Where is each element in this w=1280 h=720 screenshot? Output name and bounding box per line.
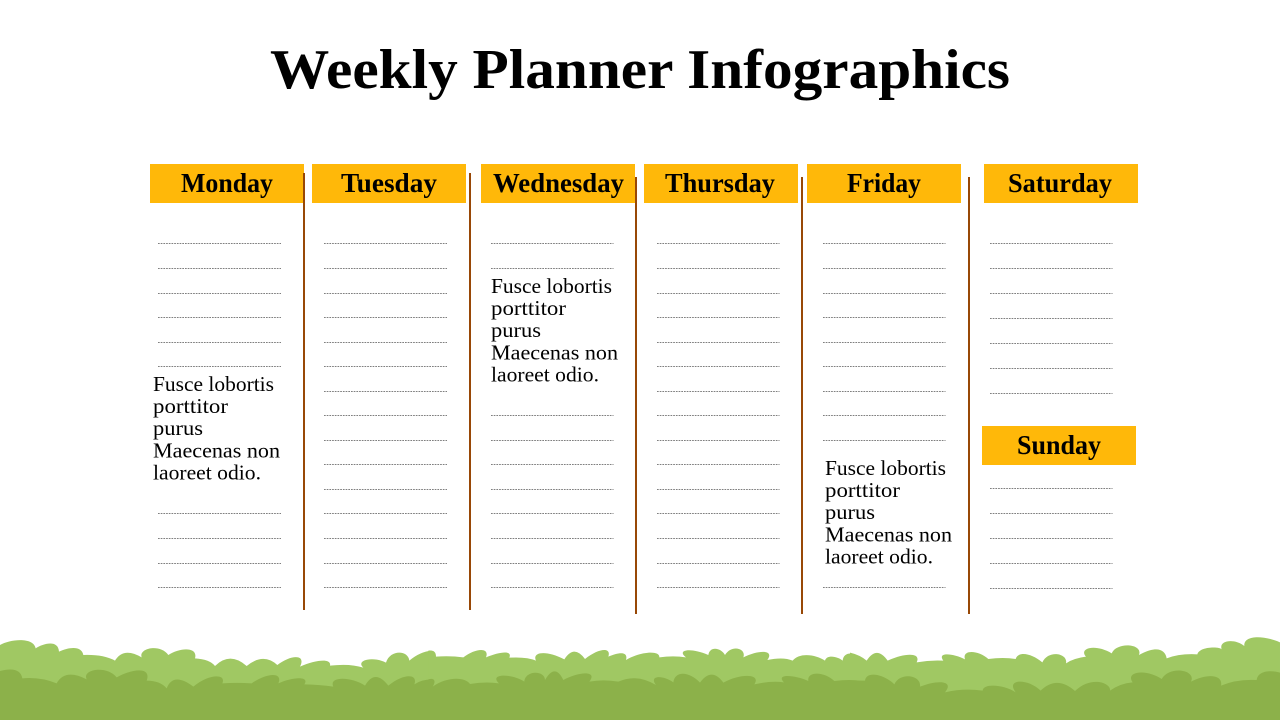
friday header	[807, 164, 961, 203]
tuesday header: Tuesday	[341, 168, 437, 198]
wednesday note: Maecenas non	[491, 340, 618, 364]
thursday header	[644, 164, 798, 203]
monday note: porttitor	[153, 394, 228, 418]
sunday header: Sunday	[1017, 430, 1101, 460]
wednesday note	[491, 274, 618, 386]
panel: saturday	[984, 164, 1138, 394]
saturday header: Saturday	[1008, 168, 1112, 198]
panel: wednesday	[481, 164, 635, 588]
friday note: Fusce lobortis	[825, 456, 946, 480]
wednesday header	[481, 164, 635, 203]
sunday writing lines	[990, 488, 1112, 588]
panel: thursday	[644, 164, 798, 588]
sunday header	[982, 426, 1136, 465]
wednesday note: Fusce lobortis	[491, 274, 612, 298]
panel: monday	[150, 164, 304, 588]
monday note	[153, 372, 280, 484]
wednesday note: laoreet odio.	[491, 362, 599, 386]
monday note: Fusce lobortis	[153, 372, 274, 396]
friday note: Maecenas non	[825, 522, 952, 546]
saturday writing lines	[990, 244, 1112, 394]
panel: tuesday	[312, 164, 466, 588]
panel: friday	[807, 164, 961, 588]
monday note: purus	[153, 416, 203, 440]
grass border	[0, 637, 1280, 720]
friday note: porttitor	[825, 478, 900, 502]
monday writing lines	[158, 244, 281, 588]
friday header: Friday	[847, 168, 921, 198]
wednesday note: porttitor	[491, 296, 566, 320]
monday header	[150, 164, 304, 203]
friday writing lines	[823, 244, 946, 588]
thursday writing lines	[657, 244, 780, 588]
saturday header	[984, 164, 1138, 203]
friday note: laoreet odio.	[825, 544, 933, 568]
title: Weekly Planner Infographics	[270, 39, 1010, 101]
wednesday note: purus	[491, 318, 541, 342]
column dividers	[303, 173, 970, 614]
tuesday header	[312, 164, 466, 203]
back grass layer	[0, 637, 1280, 720]
monday note: laoreet odio.	[153, 460, 261, 484]
tuesday writing lines	[324, 244, 447, 588]
friday note: purus	[825, 500, 875, 524]
wednesday writing lines	[491, 244, 614, 588]
friday note	[825, 456, 952, 568]
panel: sunday	[982, 426, 1136, 588]
wednesday header: Wednesday	[493, 168, 624, 198]
front grass layer	[0, 670, 1280, 720]
monday header: Monday	[181, 168, 273, 198]
thursday header: Thursday	[665, 168, 775, 198]
monday note: Maecenas non	[153, 438, 280, 462]
